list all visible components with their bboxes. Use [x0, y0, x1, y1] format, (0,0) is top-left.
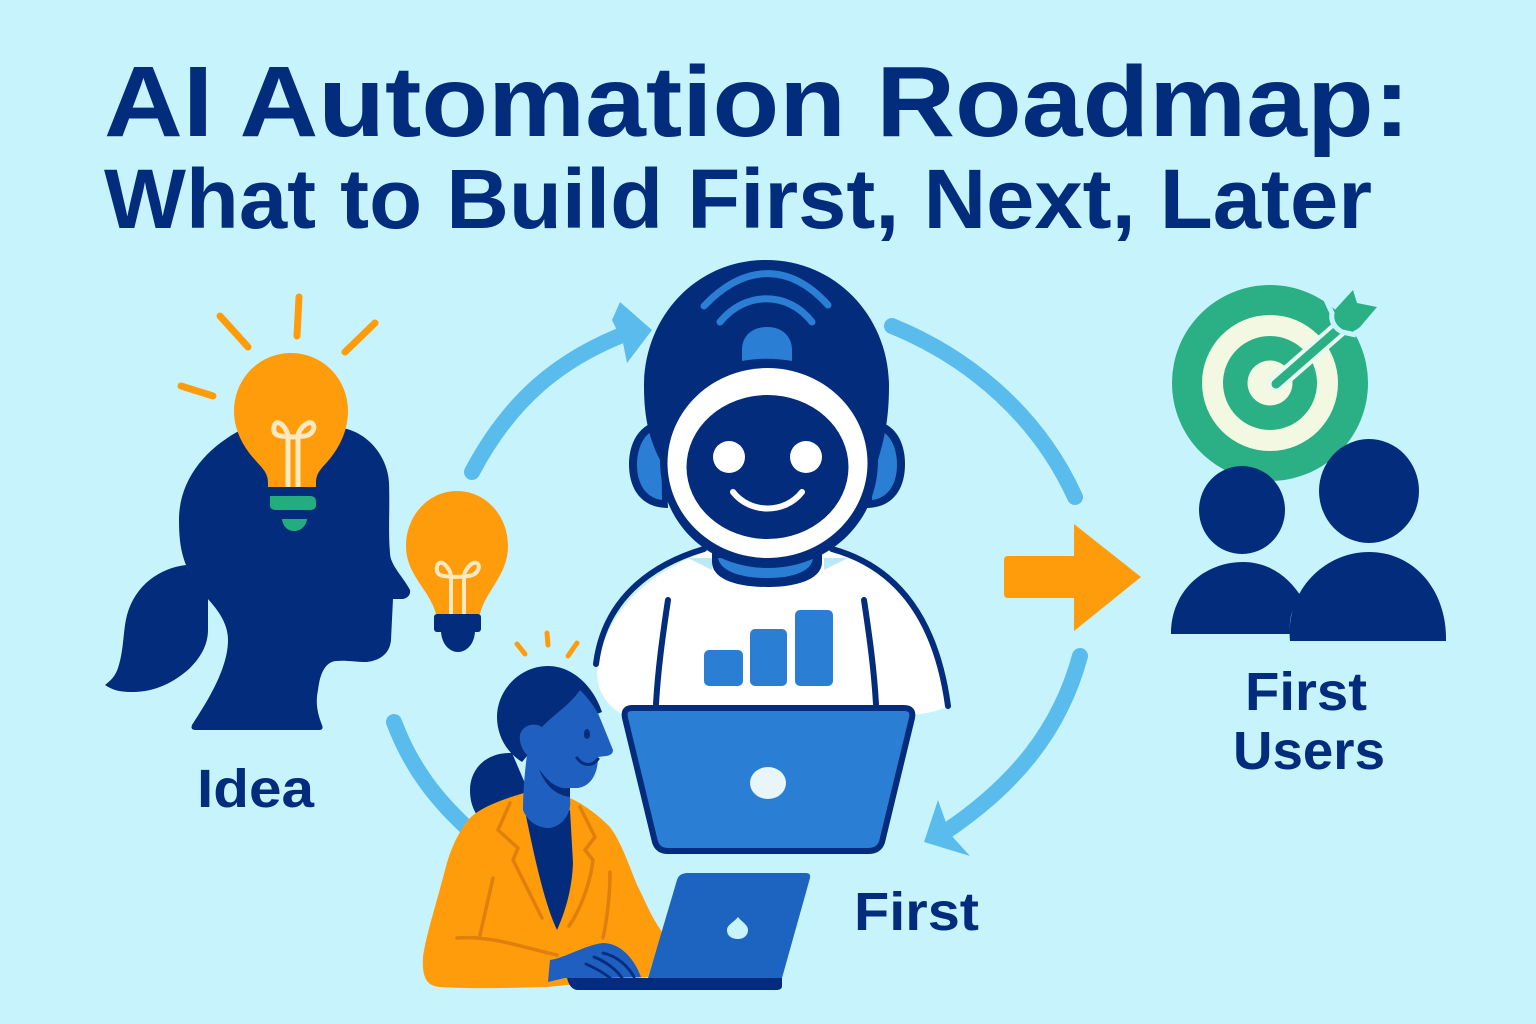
- face and hair: [497, 666, 613, 828]
- icon: orange arrow: [1004, 524, 1141, 631]
- label: First Users: [1233, 662, 1385, 781]
- icon: head silhouette with ponytail: [105, 423, 410, 730]
- label: First Users: Users: [1233, 721, 1385, 781]
- robot helmet: [644, 260, 889, 568]
- arrow: users to first: [924, 656, 1080, 856]
- hair bun: [470, 753, 530, 820]
- icon: two users: [1171, 439, 1446, 641]
- bar chart on robot chest: [704, 610, 833, 686]
- arrow: idea to robot: [472, 302, 652, 472]
- title: What to Build First, Next, Later: [104, 152, 1372, 246]
- arrow: lower left arc: [394, 722, 475, 835]
- label: First Users: First: [1245, 662, 1367, 722]
- robot ear pieces: [629, 420, 905, 508]
- title: AI Automation Roadmap:: [104, 46, 1410, 158]
- hand: [548, 943, 641, 982]
- icon: large light bulb: [234, 353, 348, 531]
- icon: target with arrow: [1172, 285, 1377, 481]
- title: [104, 46, 1410, 246]
- attention marks: [517, 633, 577, 656]
- icon: robot: [596, 260, 948, 716]
- arrow: robot to users arc: [892, 326, 1075, 497]
- label: First: First: [854, 882, 979, 942]
- robot face ring: [668, 368, 868, 558]
- jacket: [423, 793, 662, 988]
- icon: small light bulb: [406, 491, 508, 652]
- robot body: [596, 548, 948, 716]
- small laptop: [567, 873, 810, 990]
- icon: large laptop: [625, 708, 912, 851]
- icon: light bulb rays: [181, 297, 375, 396]
- label: Idea: Idea: [197, 759, 315, 819]
- robot neck: [712, 540, 822, 587]
- person at laptop: [423, 633, 810, 990]
- robot face: [686, 395, 848, 539]
- robot wifi signal: [704, 274, 828, 361]
